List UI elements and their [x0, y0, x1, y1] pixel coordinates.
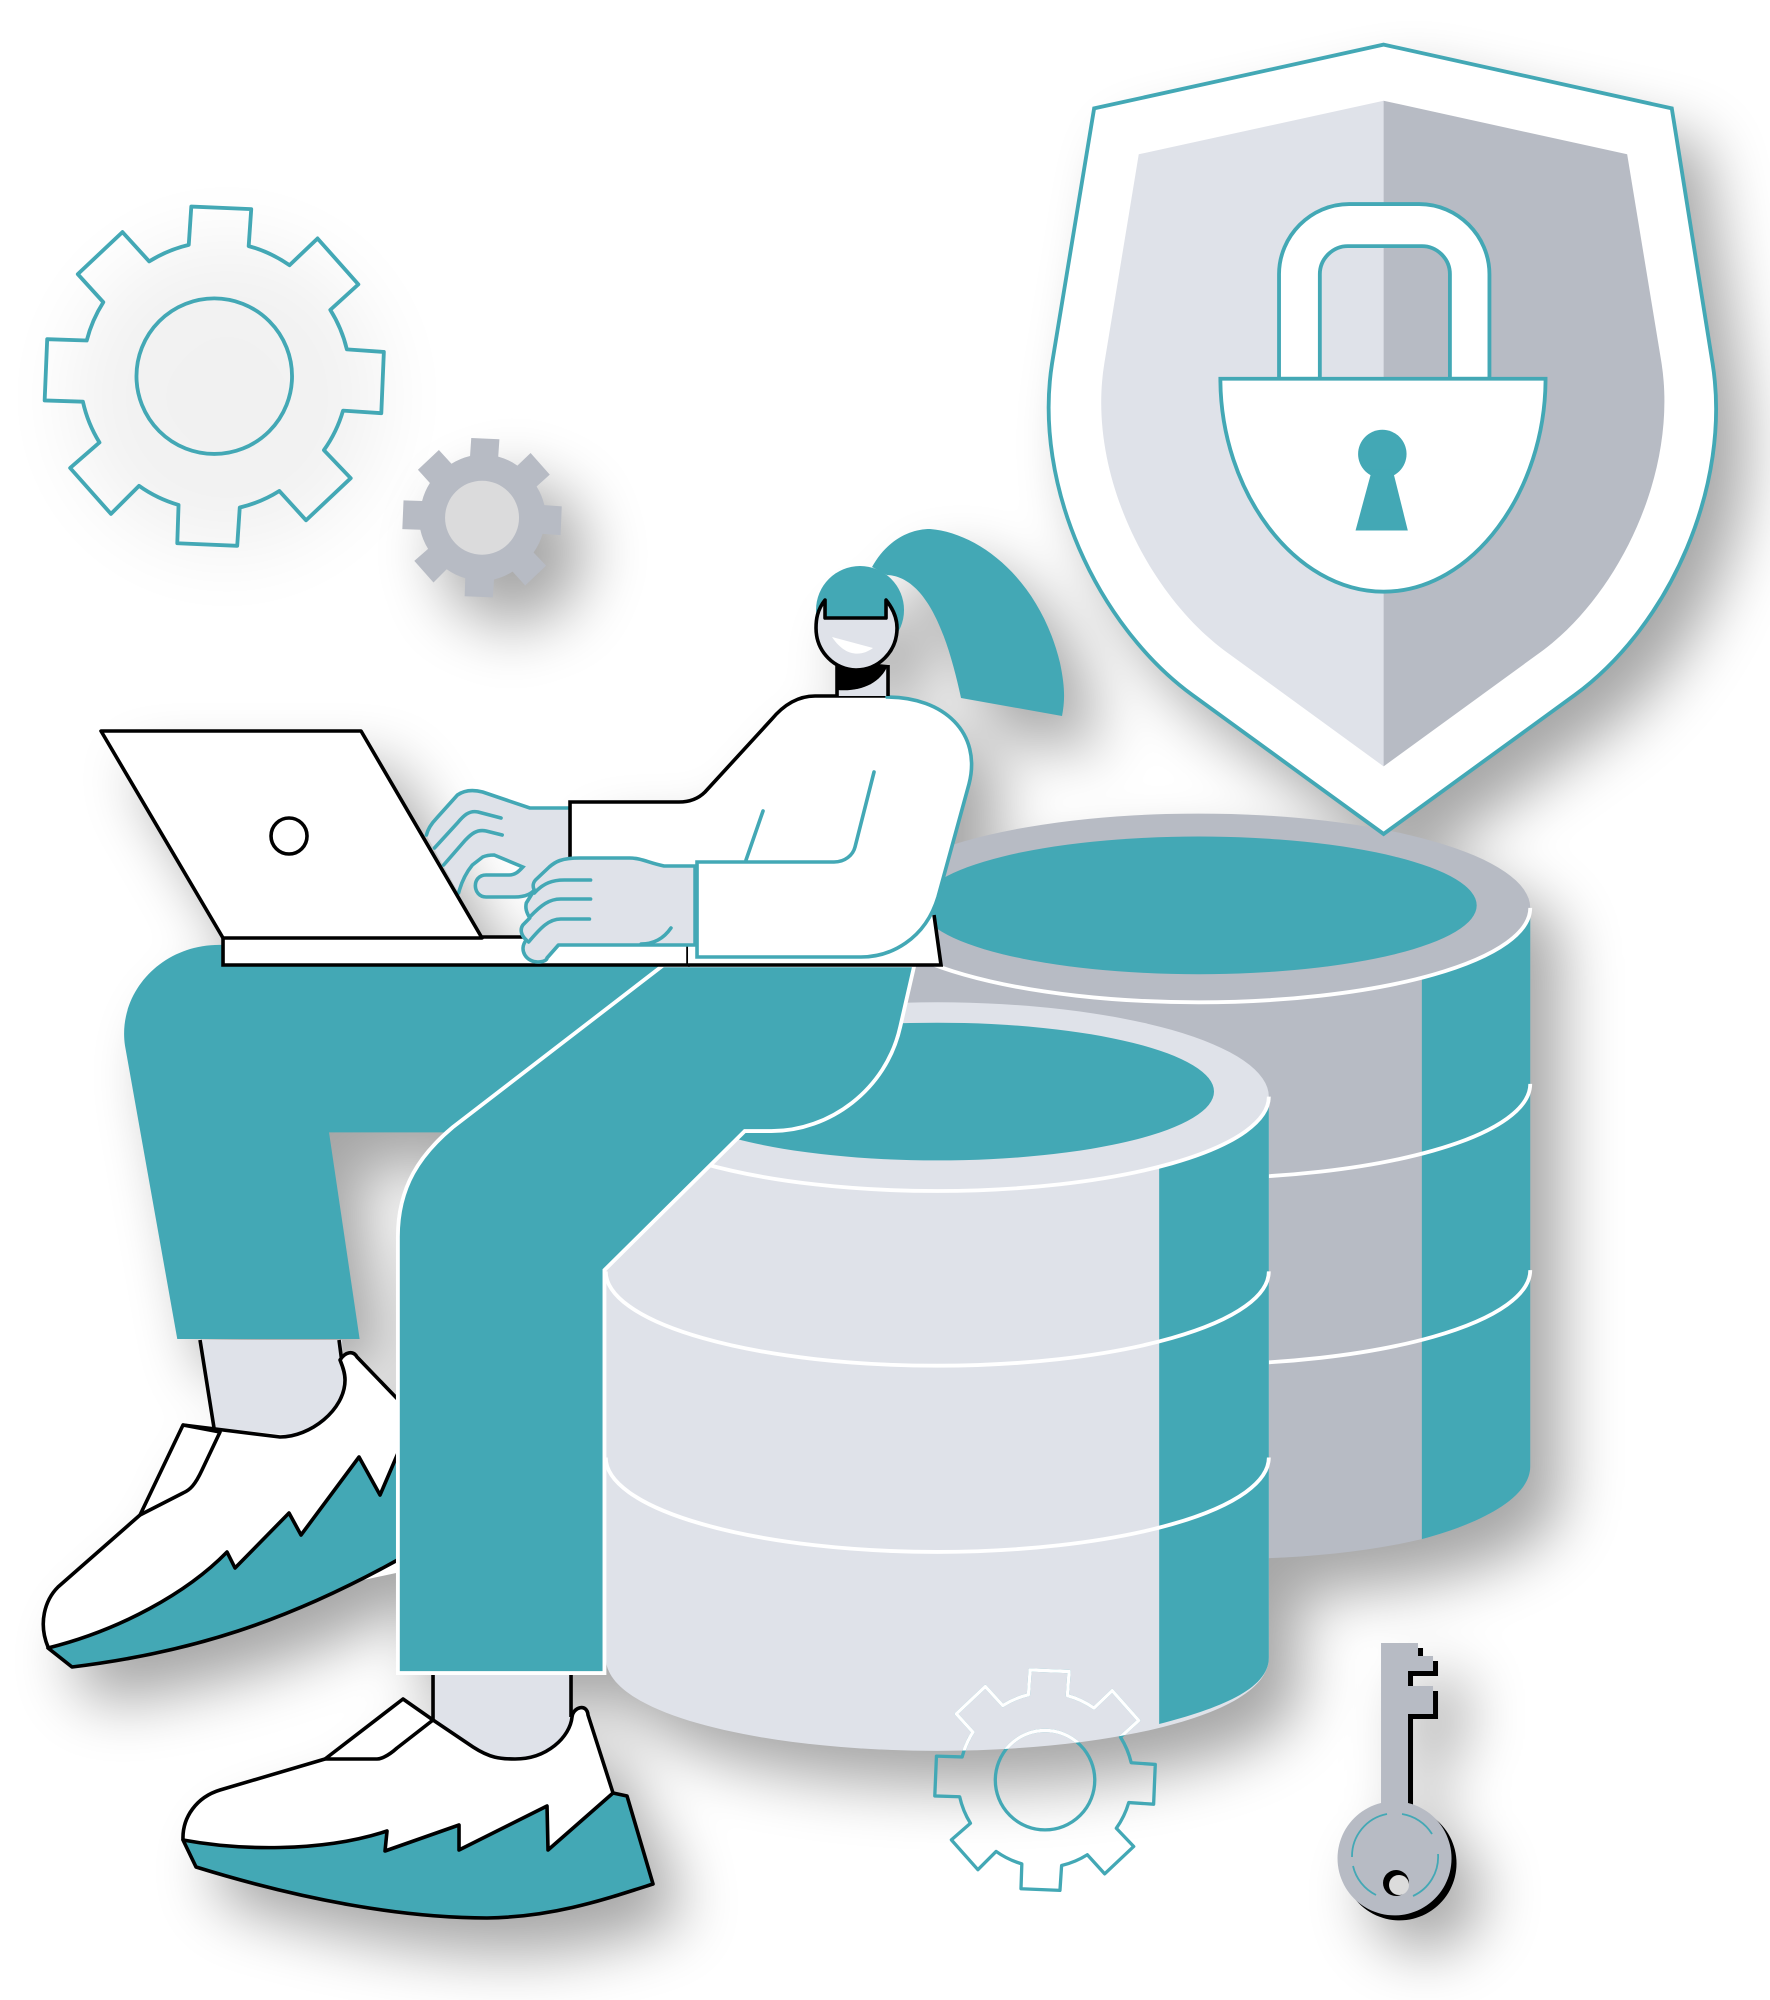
person: back shoe and sock	[43, 1340, 410, 1667]
person: ponytail hair	[872, 529, 1064, 716]
icon: outlined gear on database	[935, 1670, 1155, 1890]
icon: small grey gear	[402, 438, 562, 597]
security shield with padlock	[1049, 45, 1716, 834]
front hand	[521, 858, 695, 962]
person: front leg	[398, 965, 914, 1673]
front database cylinder	[606, 1002, 1269, 1751]
back hand	[426, 791, 570, 897]
laptop screen	[101, 731, 482, 938]
soft shadow beneath large gear	[68, 237, 386, 556]
head with hair and neck	[816, 566, 904, 696]
rear database cylinder	[867, 814, 1530, 1560]
torso and sleeve	[570, 696, 972, 957]
laptop base	[223, 915, 941, 965]
person: back leg	[124, 945, 663, 1339]
person: upper body, laptop, hands and head	[101, 566, 972, 965]
person: front shoe and sock	[183, 1672, 653, 1918]
icon: key	[1338, 1643, 1457, 1920]
icon: large outlined gear	[45, 207, 384, 546]
